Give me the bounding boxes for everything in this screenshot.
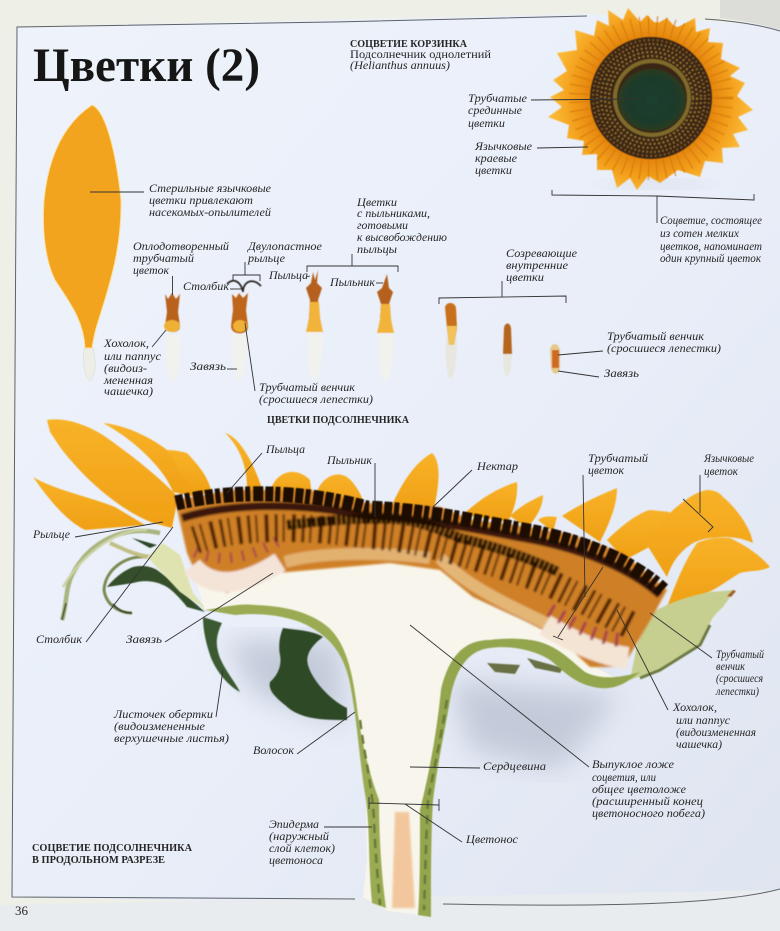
section labels: (наружный <box>269 830 329 843</box>
page number: 36 <box>15 903 28 918</box>
floret labels: пыльцы <box>357 244 397 256</box>
floret 4 <box>377 274 394 380</box>
sunflower labels: цветков, напоминает <box>660 241 762 253</box>
sunflower labels: цветки <box>475 165 512 177</box>
ray floret label: Стерильные язычковые <box>149 183 271 195</box>
section labels: Выпуклое ложе <box>592 759 674 771</box>
floret labels: или паппус <box>104 351 161 363</box>
floret labels: трубчатый <box>133 252 194 265</box>
section labels: Трубчатый <box>588 452 648 465</box>
receptacle and peduncle pith <box>190 560 620 916</box>
ray floret label <box>90 183 271 219</box>
section labels: венчик <box>716 661 746 673</box>
floret labels: Завязь <box>604 368 639 380</box>
sunflower labels: один крупный цветок <box>660 252 762 265</box>
section labels: соцветия, или <box>592 772 656 784</box>
floret labels: рыльце <box>247 253 285 265</box>
floret labels: с пыльниками, <box>357 208 430 220</box>
epidermis left <box>205 604 386 908</box>
floret 5 <box>445 303 457 378</box>
heading: capitulum <box>350 39 491 72</box>
ray floret label: насекомых-опылителей <box>149 206 271 219</box>
floret labels: к высвобождению <box>357 232 447 244</box>
section labels: Нектар <box>476 461 518 473</box>
floret labels: Оплодотворенный <box>133 240 229 253</box>
section labels: или паппус <box>676 715 730 727</box>
floret labels <box>103 197 721 426</box>
peduncle core stripe <box>392 812 415 908</box>
disc florets <box>590 37 712 159</box>
sunflower labels: Трубчатые <box>468 93 527 105</box>
section labels: Эпидерма <box>269 819 319 831</box>
section labels: Пыльца <box>265 444 305 456</box>
floret labels: (сросшиеся лепестки) <box>259 394 373 406</box>
section labels: Завязь <box>126 634 162 646</box>
floret labels: Столбик <box>183 281 230 293</box>
section labels <box>32 444 764 867</box>
floret 7 <box>550 344 560 374</box>
sunflower labels: краевые <box>475 153 517 165</box>
epidermis right <box>418 639 640 917</box>
sunflower labels: Язычковые <box>474 141 532 153</box>
section labels: (сросшиеся <box>716 673 763 685</box>
cast shadows <box>225 640 620 770</box>
floret labels: Созревающие <box>506 248 577 260</box>
floret labels: Двулопастное <box>247 241 322 253</box>
section labels: цветок <box>704 466 739 478</box>
section labels: Пыльник <box>326 455 373 467</box>
section labels: (видоизмененная <box>676 727 756 739</box>
floret labels: чашечка) <box>104 386 153 398</box>
section labels: Рыльце <box>32 529 70 541</box>
section labels: Цветонос <box>465 834 518 846</box>
floret 6 <box>503 324 512 376</box>
florets row <box>164 270 560 381</box>
floret labels: Пыльца <box>268 270 308 282</box>
ray florets in section <box>33 419 770 607</box>
ray florets <box>548 8 753 190</box>
floret labels: цветки <box>506 272 544 284</box>
sunflower labels <box>468 93 762 265</box>
floret labels: Завязь <box>190 361 226 373</box>
floret labels: (видоиз- <box>104 363 147 375</box>
heading: capitulum: (Helianthus annuus) <box>350 60 450 72</box>
section labels: общее цветоложе <box>592 784 686 796</box>
section labels: цветоносного побега) <box>592 808 705 820</box>
floret labels: Пыльник <box>329 277 376 289</box>
section labels: Волосок <box>253 745 295 757</box>
ray floret label: цветки привлекают <box>149 195 253 207</box>
floret labels: Хохолок, <box>103 338 149 350</box>
cross-section of the flower head <box>33 419 770 917</box>
heading: capitulum: Подсолнечник однолетний <box>350 49 491 61</box>
floret 2 <box>227 281 261 380</box>
curled style <box>62 531 160 620</box>
section labels: слой клеток) <box>269 842 335 855</box>
floret labels: готовыми <box>357 220 408 232</box>
dark centre <box>618 69 686 131</box>
sunflower labels: из сотен мелких <box>660 228 740 240</box>
section labels: Хохолок, <box>672 702 717 714</box>
floret labels: внутренние <box>506 260 568 272</box>
title: Цветки (2) <box>33 39 260 92</box>
section labels: цветок <box>588 465 625 477</box>
floret labels: (сросшиеся лепестки) <box>607 343 721 355</box>
section labels: чашечка) <box>676 739 722 751</box>
section caption: СОЦВЕТИЕ ПОДСОЛНЕЧНИКА <box>32 843 192 854</box>
floret 1 <box>164 293 180 381</box>
section labels: Трубчатый <box>716 648 764 661</box>
anther comb <box>176 494 663 590</box>
sunflower head <box>548 8 753 190</box>
section labels: (расширенный конец <box>592 795 703 808</box>
bilobed stigma <box>227 281 261 292</box>
floret 3 <box>306 270 323 379</box>
icon: single ray floret <box>43 105 121 381</box>
involucral bracts <box>62 530 736 720</box>
sunflower labels: цветки <box>468 118 505 130</box>
section caption: В ПРОДОЛЬНОМ РАЗРЕЗЕ <box>32 855 165 866</box>
floret labels: ЦВЕТКИ ПОДСОЛНЕЧНИКА <box>267 415 409 426</box>
floret labels: Цветки <box>356 197 397 209</box>
section labels: цветоноса <box>269 855 323 867</box>
heading: capitulum: СОЦВЕТИЕ КОРЗИНКА <box>350 39 467 50</box>
section labels: (видоизмененные <box>114 721 205 733</box>
floret labels: цветок <box>133 265 170 277</box>
stem dark stripes <box>360 700 447 910</box>
section labels: Сердцевина <box>483 761 546 773</box>
section labels: лепестки) <box>715 686 759 698</box>
section labels: Язычковые <box>703 453 754 465</box>
section caption <box>32 843 192 866</box>
bands of florets <box>175 490 667 667</box>
section labels: Столбик <box>36 634 83 646</box>
floret labels: мененная <box>103 375 153 387</box>
floret labels: Трубчатый венчик <box>607 330 705 343</box>
green mound at receptacle edge <box>147 543 207 610</box>
section labels: Листочек обертки <box>113 709 213 721</box>
sunflower labels: срединные <box>468 105 522 117</box>
sunflower labels: Соцветие, состоящее <box>660 215 762 227</box>
floret labels: Трубчатый венчик <box>259 381 356 394</box>
section labels: верхушечные листья) <box>114 733 229 745</box>
